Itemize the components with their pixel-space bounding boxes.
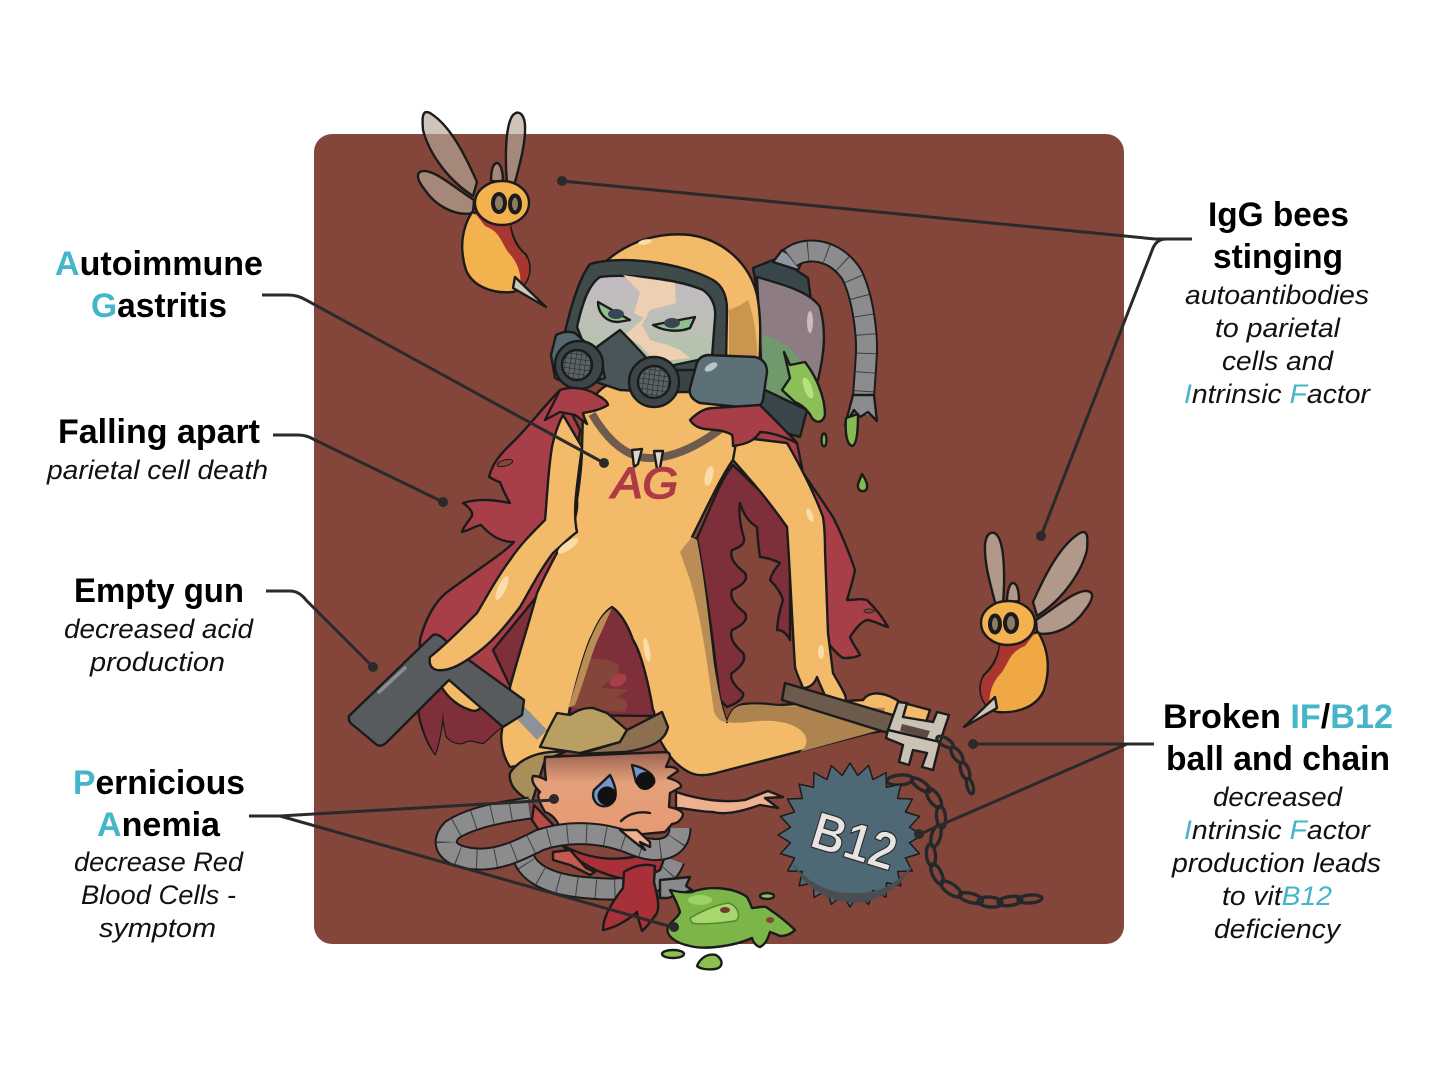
scarf knot and tails bbox=[603, 865, 658, 931]
label: Broken IF/B12 ball and chain: production leads bbox=[1171, 848, 1381, 878]
filter right mesh bbox=[638, 366, 670, 398]
wing large bbox=[423, 112, 477, 196]
label: Broken IF/B12 ball and chain: Intrinsic Factor bbox=[1184, 815, 1371, 845]
drop on panel bbox=[760, 893, 774, 899]
cape: right bbox=[740, 405, 888, 658]
label: Pernicious Anemia: symptom bbox=[99, 913, 216, 943]
puddle shape bbox=[667, 888, 795, 948]
body: left inner leg shadow bbox=[568, 608, 612, 708]
highlight chest bbox=[703, 465, 715, 487]
wing small bbox=[1007, 583, 1019, 602]
slime drop 1 bbox=[822, 434, 826, 446]
necklace fang left bbox=[632, 449, 642, 467]
drop right bbox=[697, 955, 722, 969]
hose collar bbox=[773, 250, 802, 270]
eye right pupil bbox=[664, 318, 680, 328]
label: Autoimmune Gastritis bbox=[55, 245, 263, 325]
leader: Broken IF/B12 bbox=[914, 739, 1154, 839]
leader: Autoimmune Gastritis bbox=[262, 295, 609, 468]
wing small bbox=[491, 163, 503, 182]
leader: Pernicious Anemia bbox=[249, 794, 679, 932]
key upper bit bbox=[888, 702, 949, 742]
label: IgG bees stinging: autoantibodies bbox=[1185, 280, 1369, 310]
chest letters: AG bbox=[609, 459, 678, 508]
hood highlight bbox=[638, 238, 652, 246]
label: IgG bees stinging: IgG bees bbox=[1208, 196, 1349, 234]
label: IgG bees stinging: cells and bbox=[1222, 346, 1334, 376]
visor glass bbox=[577, 276, 715, 368]
label: Pernicious Anemia bbox=[73, 764, 245, 943]
filter left mesh bbox=[562, 350, 592, 380]
highlight left arm bbox=[493, 575, 511, 601]
bee stinger bbox=[964, 697, 997, 727]
label: Autoimmune Gastritis: Gastritis bbox=[91, 287, 227, 325]
cell eye left bbox=[593, 775, 616, 806]
hand detail: finger in gun trigger bbox=[440, 678, 482, 711]
cape: lower left dark tatters bbox=[419, 680, 503, 754]
red highlight between legs bbox=[607, 671, 629, 689]
lower hose coil fill bbox=[522, 845, 674, 889]
hose torn end bbox=[845, 395, 877, 425]
label: Autoimmune Gastritis: Autoimmune bbox=[55, 245, 263, 283]
panel: brown background bbox=[314, 134, 1124, 944]
hose on tank: outline bbox=[790, 251, 866, 415]
epaulet left bbox=[545, 388, 608, 424]
body: right leg shadow bbox=[680, 537, 727, 722]
bee: right bbox=[964, 532, 1092, 727]
tank: highlight bbox=[807, 311, 813, 333]
highlight arm bbox=[805, 507, 815, 523]
label: Broken IF/B12 ball and chain: to vitB12 bbox=[1222, 881, 1332, 911]
mask frame bbox=[563, 260, 727, 385]
highlight forearm bbox=[818, 645, 824, 659]
bee eye left bbox=[493, 194, 505, 212]
label: Broken IF/B12 ball and chain: decreased bbox=[1213, 782, 1343, 812]
bee head bbox=[981, 601, 1035, 645]
tank: slime tint bbox=[763, 335, 802, 402]
cell frown bbox=[621, 812, 650, 821]
shoulder pad highlight bbox=[703, 360, 719, 374]
bee body bbox=[980, 632, 1048, 712]
cape: dark lining behind left leg bbox=[493, 590, 542, 690]
eye right iris bbox=[632, 765, 654, 787]
label: Broken IF/B12 ball and chain: Broken IF/B12 bbox=[1163, 698, 1393, 736]
eye left iris bbox=[593, 775, 616, 806]
label: Broken IF/B12 ball and chain bbox=[1163, 698, 1393, 944]
hat back brim bbox=[510, 752, 565, 802]
illustration: hazmat character with cape bbox=[349, 234, 930, 775]
label: IgG bees stinging bbox=[1184, 196, 1371, 409]
scarf band bbox=[562, 845, 668, 880]
eye left bbox=[598, 302, 630, 322]
label: Falling apart bbox=[46, 413, 268, 485]
bee eye right bbox=[510, 196, 520, 212]
drop left bbox=[662, 950, 684, 958]
label: Pernicious Anemia: Blood Cells - bbox=[81, 880, 236, 910]
red blood cell cowboy bbox=[446, 708, 783, 931]
bee head bbox=[475, 181, 529, 225]
lower hose coil outline bbox=[522, 845, 674, 889]
puddle highlight loop bbox=[690, 903, 739, 924]
wing upper right bbox=[506, 113, 525, 186]
leader: IgG bees bbox=[557, 176, 1192, 541]
label: IgG bees stinging: Intrinsic Factor bbox=[1184, 379, 1371, 409]
slime drop 2 bbox=[858, 474, 867, 491]
leader: Empty gun bbox=[266, 591, 378, 672]
leader: Falling apart bbox=[273, 435, 448, 507]
cape: right tatter hole bbox=[864, 609, 874, 613]
cell arm bbox=[676, 791, 783, 813]
label: Broken IF/B12 ball and chain: ball and chain bbox=[1166, 740, 1390, 778]
hood shade bbox=[729, 300, 757, 380]
slime drips bbox=[846, 414, 858, 446]
label: Pernicious Anemia: decrease Red bbox=[74, 847, 244, 877]
eye left pupil bbox=[598, 786, 616, 806]
gun bbox=[349, 635, 524, 746]
label: Pernicious Anemia: Pernicious bbox=[73, 764, 245, 802]
wing large bbox=[1033, 532, 1087, 616]
cell red ruffles bbox=[532, 805, 560, 840]
bee wings bbox=[418, 112, 525, 214]
highlights bbox=[493, 465, 824, 662]
cape: left bbox=[417, 390, 580, 754]
slime puddle bbox=[662, 888, 795, 969]
hose on tank: ribs bbox=[790, 251, 866, 415]
wing upper right bbox=[985, 533, 1004, 606]
bee wings bbox=[985, 532, 1092, 634]
right arm bbox=[733, 437, 846, 708]
bee: top left bbox=[418, 112, 546, 307]
label: Broken IF/B12 ball and chain: deficiency bbox=[1214, 914, 1342, 944]
bee eye right bbox=[990, 616, 1000, 632]
label: Falling apart: parietal cell death bbox=[46, 455, 268, 485]
label: Empty gun: decreased acid bbox=[64, 614, 254, 644]
cell body bbox=[532, 752, 683, 838]
filter left housing bbox=[551, 332, 605, 388]
epaulet right bbox=[690, 405, 797, 446]
upper hose outline bbox=[446, 808, 680, 859]
upper hose ribs bbox=[446, 808, 680, 859]
filter left bbox=[551, 332, 605, 389]
broken chain on key bbox=[935, 734, 975, 795]
mask snout bbox=[590, 330, 662, 392]
tank: bottom collar bbox=[755, 390, 807, 437]
label: Empty gun bbox=[64, 572, 254, 677]
label: Empty gun: Empty gun bbox=[74, 572, 244, 610]
highlight hip bbox=[556, 536, 580, 556]
wing lower bbox=[418, 171, 474, 214]
filter left ring bbox=[555, 341, 603, 389]
gun highlight bbox=[379, 668, 405, 692]
cape: small hole bbox=[496, 458, 514, 468]
eye left pupil bbox=[608, 309, 624, 319]
necklace bbox=[592, 414, 722, 458]
ball lower shade bbox=[792, 860, 915, 903]
wing lower bbox=[1036, 591, 1092, 634]
bee body bbox=[462, 212, 530, 292]
hose on tank: fill bbox=[790, 251, 866, 415]
cell lower drips bbox=[553, 850, 595, 875]
puddle right hole bbox=[766, 917, 774, 923]
cape: between legs bbox=[570, 607, 655, 716]
eye right bbox=[653, 317, 695, 331]
key handle bbox=[782, 683, 896, 733]
bee stripe bbox=[475, 213, 529, 288]
cell eye right bbox=[632, 765, 654, 790]
cape: dark lining between torso and right arm bbox=[697, 465, 790, 707]
lower hose coil ribs bbox=[522, 845, 674, 889]
key slot bbox=[900, 724, 930, 738]
body: torso and legs bbox=[501, 385, 930, 775]
bee stripe bbox=[981, 633, 1035, 708]
label: Empty gun: production bbox=[89, 647, 225, 677]
face through cracked visor bbox=[623, 275, 690, 362]
label: IgG bees stinging: to parietal bbox=[1215, 313, 1341, 343]
mask strap bbox=[660, 370, 710, 392]
B12 chain bbox=[887, 774, 1042, 908]
filter right bbox=[629, 357, 679, 407]
background gap between legs bbox=[572, 658, 628, 712]
eye right pupil bbox=[636, 772, 654, 790]
bee eye left bbox=[1005, 614, 1017, 632]
broken IF key bbox=[782, 683, 949, 770]
hat brim right bbox=[580, 712, 668, 754]
puddle light patch bbox=[688, 895, 712, 905]
bee stinger bbox=[513, 277, 546, 307]
label: IgG bees stinging: stinging bbox=[1213, 238, 1343, 276]
ball label: B12 bbox=[804, 801, 904, 883]
hose tail bbox=[660, 877, 692, 898]
key lower bit bbox=[886, 730, 940, 770]
label: Falling apart: Falling apart bbox=[58, 413, 260, 451]
B12 spiked ball bbox=[778, 763, 922, 907]
ball spikes bbox=[778, 763, 922, 907]
hood bbox=[605, 234, 760, 385]
tank: slime highlight bbox=[800, 376, 816, 400]
upper hose fill bbox=[446, 808, 680, 859]
gun nozzle bbox=[516, 708, 542, 735]
tank: neck bbox=[753, 258, 811, 300]
tank: green slime bbox=[782, 352, 825, 422]
filter right ring bbox=[629, 357, 679, 407]
label: Pernicious Anemia: Anemia bbox=[97, 806, 221, 844]
puddle hole bbox=[720, 907, 730, 913]
left arm bbox=[430, 415, 582, 670]
hat crown bbox=[540, 708, 627, 753]
necklace fang right bbox=[654, 451, 663, 469]
body: foot shadow bbox=[727, 704, 885, 752]
shoulder pad bbox=[690, 355, 767, 408]
tank: body bbox=[757, 277, 824, 405]
cell small hand bbox=[620, 830, 650, 850]
highlight leg bbox=[642, 638, 652, 662]
